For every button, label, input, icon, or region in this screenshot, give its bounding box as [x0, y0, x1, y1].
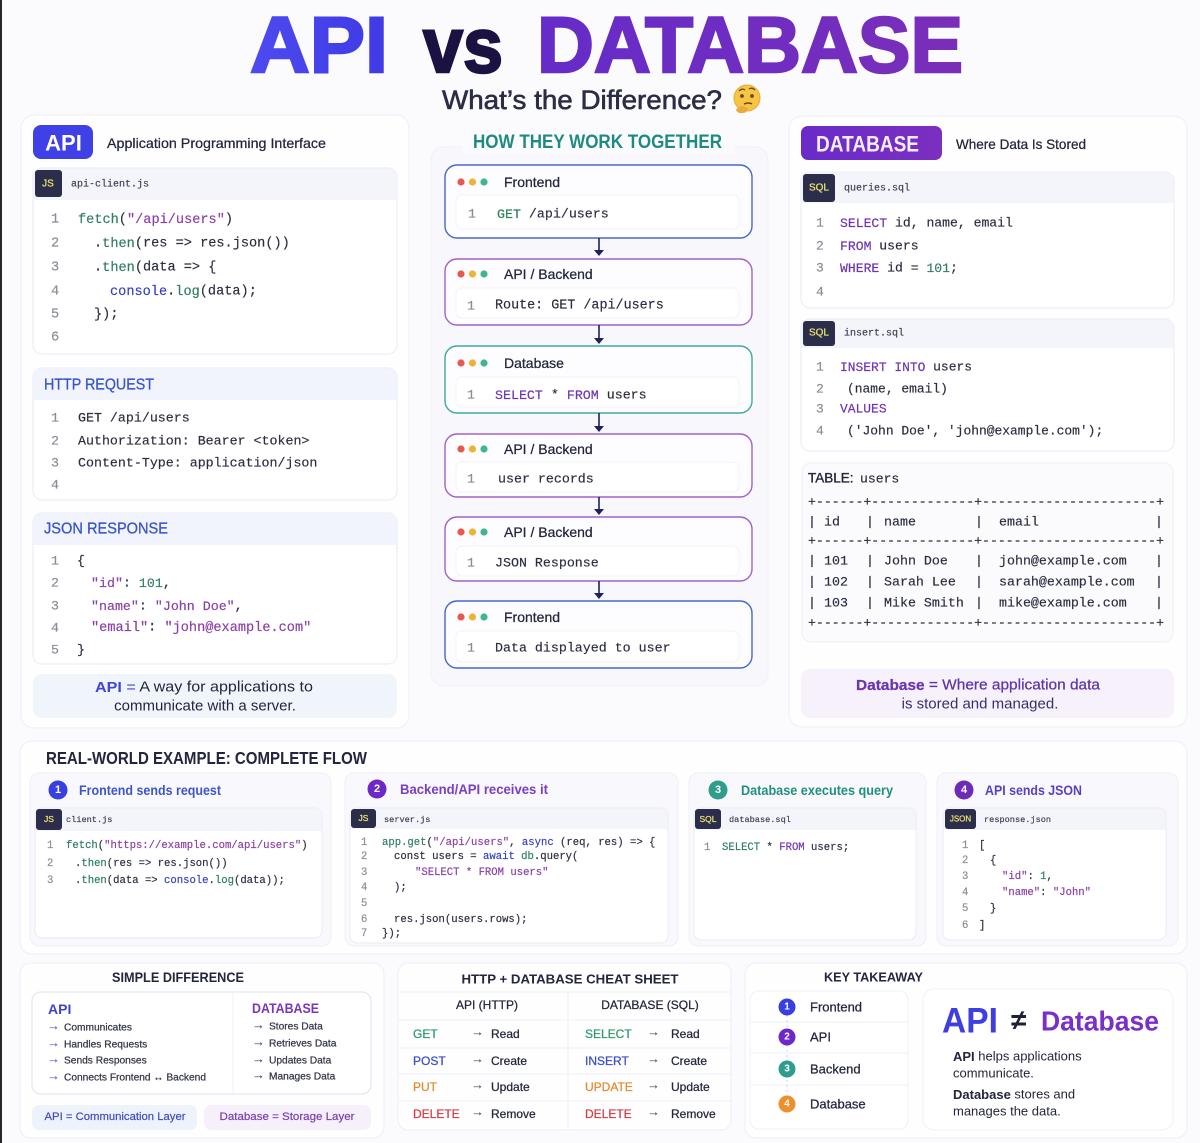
step 1: 2 — [47, 858, 53, 870]
code card: HTTP request: 2 — [51, 434, 59, 449]
table columns: | — [975, 554, 983, 569]
subtitle: What’s the Difference? — [442, 85, 722, 115]
heading: REAL-WORLD EXAMPLE: COMPLETE FLOW — [46, 748, 367, 768]
code card: JSON response: 4 — [51, 621, 59, 636]
comparison box: Connects Frontend ↔ Backend — [64, 1072, 206, 1084]
step 1: 1 — [47, 840, 53, 852]
column: database SQL: → — [647, 1104, 660, 1119]
table columns: 102 — [824, 575, 848, 590]
heading: KEY TAKEAWAY — [824, 970, 923, 984]
column: API HTTP: → — [471, 1024, 484, 1039]
code card: queries.sql: 1 — [816, 216, 824, 231]
code card: api-client.js: console.log(data); — [110, 285, 257, 300]
step: Frontend: GET /api/users — [497, 207, 609, 222]
step: Database: Database — [504, 355, 564, 371]
takeaway card — [923, 989, 1173, 1130]
callout: database definition: Database = Where application data — [856, 676, 1101, 694]
comparison box: Updates Data — [269, 1056, 332, 1066]
table columns: | — [1155, 515, 1163, 530]
table columns: | — [1155, 554, 1163, 569]
takeaway card: ≠ — [1011, 1004, 1026, 1036]
comparison box: → — [47, 1068, 60, 1083]
column: API HTTP: Create — [491, 1054, 527, 1068]
step 2: 1 — [361, 837, 367, 849]
step 4: ] — [979, 920, 985, 932]
flow list: Backend — [810, 1062, 861, 1076]
heading: HOW THEY WORK TOGETHER — [473, 131, 722, 153]
comparison box: API — [48, 1001, 71, 1017]
comparison box: → — [47, 1018, 60, 1033]
column: database SQL: → — [647, 1077, 660, 1092]
step 1: fetch("https://example.com/api/users") — [66, 840, 308, 852]
step 2: 2 — [361, 851, 367, 863]
step 1: 1 — [55, 784, 61, 796]
column: API HTTP: Read — [491, 1027, 520, 1041]
comparison box: → — [47, 1035, 60, 1050]
takeaway card: communicate. — [953, 1066, 1034, 1080]
panel: key takeaway — [745, 963, 1187, 1138]
step: Frontend display: Frontend — [504, 609, 560, 625]
code card: HTTP request: GET /api/users — [78, 411, 190, 426]
step 3: database.sql — [729, 815, 791, 825]
step 4: 4 — [962, 887, 968, 899]
column: API HTTP: PUT — [413, 1080, 438, 1094]
step 4: [ — [979, 840, 985, 852]
step 2: JS — [359, 813, 369, 823]
arrow — [594, 238, 604, 256]
step: Database — [445, 346, 752, 413]
step 1: 3 — [47, 875, 53, 887]
column: API HTTP: Remove — [491, 1107, 536, 1121]
heading: HTTP + DATABASE CHEAT SHEET — [462, 972, 679, 986]
comparison box: Manages Data — [269, 1072, 336, 1082]
column: API HTTP: API (HTTP) — [456, 998, 518, 1012]
code card: JSON response — [33, 513, 397, 664]
code card: api-client.js: 5 — [51, 308, 59, 323]
table columns: email — [999, 515, 1039, 530]
step 3 — [689, 773, 926, 946]
table columns: John Doe — [884, 554, 948, 569]
panel: how they work together — [431, 130, 768, 686]
code card: HTTP request: Content-Type: application/json — [78, 456, 317, 471]
table columns: | — [808, 554, 816, 569]
table: users: TABLE: — [808, 470, 854, 486]
code card: JSON response: JSON RESPONSE — [44, 520, 168, 538]
chip: storage layer — [204, 1105, 371, 1130]
table columns: john@example.com — [999, 554, 1127, 569]
table columns: | — [1155, 575, 1163, 590]
step: Database: SELECT * FROM users — [495, 388, 647, 403]
code card: api-client.js: 4 — [51, 285, 59, 300]
code card: insert.sql: (name, email) — [847, 382, 948, 397]
comparison box: → — [252, 1034, 265, 1049]
panel: cheat sheet — [398, 963, 731, 1130]
arrow — [594, 413, 604, 432]
code card: api-client.js: }); — [94, 308, 118, 323]
takeaway card: API — [942, 1002, 998, 1040]
flow list: Database — [810, 1096, 866, 1112]
step: API / Backend JSON: JSON Response — [495, 556, 599, 571]
table columns: mike@example.com — [999, 596, 1127, 611]
step: API / Backend records — [445, 434, 752, 497]
table columns: | — [866, 596, 874, 611]
column: API HTTP: → — [471, 1104, 484, 1119]
flow list: 4 — [784, 1098, 790, 1110]
API subtitle: Application Programming Interface — [107, 135, 326, 151]
code card: insert.sql: INSERT INTO users — [840, 360, 972, 375]
column: API HTTP: → — [471, 1051, 484, 1066]
step 4: 6 — [962, 920, 968, 932]
comparison box: Communicates — [64, 1022, 132, 1034]
table columns: sarah@example.com — [999, 575, 1135, 590]
flow list: 3 — [784, 1064, 790, 1074]
table columns: | — [866, 575, 874, 590]
column: database SQL: Remove — [671, 1107, 716, 1121]
API badge: API — [45, 130, 82, 156]
panel: simple difference — [20, 963, 384, 1138]
arrow — [594, 325, 604, 344]
step: Database: 1 — [467, 388, 475, 403]
step: API / Backend JSON — [445, 517, 752, 581]
database badge: DATABASE — [816, 132, 919, 156]
code card: JSON response: "email": "john@example.com" — [91, 621, 311, 636]
code card: queries.sql: SQL — [809, 182, 829, 194]
step: Frontend: 1 — [468, 207, 476, 222]
code card: api-client.js: .then(res => res.json()) — [94, 237, 290, 252]
step: Frontend: Frontend — [504, 174, 560, 190]
column: database SQL: INSERT — [585, 1054, 629, 1068]
callout: database definition — [801, 669, 1174, 718]
code card: insert.sql: 1 — [816, 360, 824, 375]
title: API — [250, 0, 388, 89]
code card: api-client.js: fetch("/api/users") — [78, 213, 233, 228]
table: users: +------+-------------+----------------------+ — [808, 616, 1164, 631]
flow list — [750, 991, 908, 1129]
step 1: .then(res => res.json()) — [75, 858, 228, 870]
code card: HTTP request: HTTP REQUEST — [44, 376, 154, 394]
code card: queries.sql — [801, 172, 1174, 308]
table columns: id — [824, 515, 840, 530]
comparison box: Retrieves Data — [269, 1038, 337, 1050]
step 4: 1 — [962, 840, 968, 852]
icon: thinking face — [734, 85, 760, 113]
step 4: } — [990, 903, 996, 915]
step 2: 6 — [361, 914, 367, 926]
code card: api-client.js: api-client.js — [71, 179, 149, 191]
step 3: 1 — [704, 842, 710, 854]
step 1: client.js — [66, 815, 112, 825]
code card: JSON response: 2 — [51, 576, 59, 591]
API badge — [33, 125, 93, 159]
table columns: | — [975, 515, 983, 530]
step 2: 5 — [361, 898, 367, 910]
step 4: API sends JSON — [985, 782, 1082, 798]
step 2: ); — [394, 882, 407, 894]
code card: api-client.js: JS — [42, 178, 54, 190]
code card: HTTP request: 1 — [51, 411, 59, 426]
callout: API definition: API = A way for applications to — [95, 678, 313, 696]
code card: JSON response: "name": "John Doe", — [91, 599, 243, 614]
code card: JSON response: "id": 101, — [91, 576, 171, 591]
table columns: | — [866, 554, 874, 569]
takeaway card: Database — [1041, 1006, 1159, 1036]
column: database SQL: Read — [671, 1027, 700, 1041]
step 4: 4 — [961, 784, 968, 796]
code card: insert.sql: SQL — [809, 328, 829, 338]
chip: communication layer: API = Communication Layer — [44, 1111, 186, 1123]
column: API HTTP: Update — [491, 1080, 530, 1094]
code card: insert.sql: VALUES — [840, 402, 887, 417]
table columns: Sarah Lee — [884, 575, 956, 590]
step 2: 3 — [361, 867, 367, 879]
column: database SQL: DELETE — [585, 1107, 632, 1121]
step 2: server.js — [384, 815, 430, 825]
code card: JSON response: 3 — [51, 599, 59, 614]
code card: queries.sql: WHERE id = 101; — [840, 261, 958, 276]
column: API HTTP: DELETE — [413, 1107, 460, 1121]
comparison box: → — [47, 1051, 60, 1066]
step: API / Backend route — [445, 259, 752, 325]
chip: communication layer — [32, 1105, 197, 1130]
code card: insert.sql: insert.sql — [844, 328, 904, 340]
step 2: Backend/API receives it — [400, 781, 548, 797]
code card: JSON response: } — [77, 643, 85, 658]
step: API / Backend route: API / Backend — [504, 266, 593, 282]
comparison box: → — [252, 1067, 265, 1082]
column: database SQL — [585, 998, 716, 1121]
step 4: 3 — [962, 871, 968, 883]
table columns: Mike Smith — [884, 596, 964, 611]
step: API / Backend records: user records — [498, 472, 594, 487]
step 2: 4 — [361, 882, 367, 894]
code card: queries.sql: 4 — [816, 285, 824, 300]
title: vs — [423, 1, 503, 89]
comparison box — [32, 992, 371, 1094]
code card: JSON response: 5 — [51, 643, 59, 658]
takeaway card: manages the data. — [953, 1104, 1061, 1118]
panel: database — [789, 116, 1187, 727]
column: database SQL: Update — [671, 1080, 710, 1094]
column: database SQL: SELECT — [585, 1027, 632, 1041]
comparison box: → — [252, 1051, 265, 1066]
step 1: .then(data => console.log(data)); — [75, 875, 285, 887]
step 3: SELECT * FROM users; — [722, 842, 849, 854]
comparison box: Sends Responses — [64, 1056, 147, 1066]
panel: real-world example — [20, 741, 1187, 954]
step: API / Backend records: 1 — [467, 472, 475, 487]
step 3: SQL — [699, 814, 717, 824]
flow list: 2 — [784, 1032, 790, 1042]
column: database SQL: DATABASE (SQL) — [601, 998, 699, 1012]
table columns: | — [975, 575, 983, 590]
database badge — [801, 126, 942, 160]
step 2: app.get("/api/users", async (req, res) => { — [382, 837, 655, 849]
code card: JSON response: 1 — [51, 554, 59, 569]
comparison box: Stores Data — [269, 1022, 323, 1032]
step 4: 2 — [962, 855, 968, 867]
code card: queries.sql: SELECT id, name, email — [840, 216, 1013, 231]
takeaway card: API helps applications — [953, 1048, 1082, 1064]
table columns: | — [1155, 596, 1163, 611]
code card: JSON response: { — [77, 554, 85, 569]
callout: database definition: is stored and managed. — [902, 696, 1058, 712]
column: database SQL: Create — [671, 1054, 707, 1068]
step: API / Backend route: Route: GET /api/users — [495, 299, 664, 314]
step 2: 2 — [374, 783, 380, 795]
step: Frontend — [445, 165, 752, 238]
flow list: API — [810, 1030, 831, 1044]
table columns: | — [808, 515, 816, 530]
step 2: res.json(users.rows); — [394, 914, 528, 926]
table: users — [802, 463, 1173, 642]
step 4 — [937, 773, 1178, 946]
column: API HTTP — [413, 998, 536, 1121]
comparison box: DATABASE — [252, 1000, 319, 1016]
step: Frontend display — [445, 601, 752, 668]
table columns — [808, 515, 1163, 611]
table columns: 101 — [824, 554, 848, 569]
step 4: { — [990, 855, 996, 867]
heading: SIMPLE DIFFERENCE — [112, 969, 244, 985]
table columns: name — [884, 515, 916, 530]
column: database SQL: → — [647, 1051, 660, 1066]
column: API HTTP: → — [471, 1077, 484, 1092]
code card: api-client.js: .then(data => { — [94, 261, 216, 276]
step 1 — [30, 773, 331, 946]
code card: insert.sql: 2 — [816, 382, 824, 397]
column: database SQL: UPDATE — [585, 1080, 633, 1094]
table columns: | — [808, 596, 816, 611]
column: API HTTP: GET — [413, 1027, 438, 1041]
code card: api-client.js: 2 — [51, 237, 59, 252]
column: API HTTP: POST — [413, 1054, 446, 1068]
code card: api-client.js: 3 — [51, 261, 59, 276]
code card: insert.sql: 3 — [816, 402, 824, 417]
step 2: }); — [382, 928, 401, 940]
arrow — [594, 497, 604, 515]
code card: api-client.js — [33, 168, 397, 354]
table columns: | — [808, 575, 816, 590]
step 4: JSON — [950, 814, 971, 824]
callout: API definition — [33, 674, 397, 718]
chip: storage layer: Database = Storage Layer — [220, 1111, 355, 1123]
step 2 — [345, 773, 678, 946]
code card: insert.sql: 4 — [816, 424, 824, 439]
step: Frontend display: Data displayed to user — [495, 641, 671, 656]
takeaway card: Database stores and — [953, 1086, 1075, 1102]
table columns: 103 — [824, 596, 848, 611]
step: Frontend display: 1 — [467, 641, 475, 656]
column: database SQL: → — [647, 1024, 660, 1039]
table: users: users — [860, 472, 899, 487]
table: users: +------+-------------+----------------------+ — [808, 534, 1164, 549]
step 2: const users = await db.query( — [394, 851, 578, 863]
panel: API — [21, 115, 409, 728]
title — [250, 0, 963, 89]
step 4: "id": 1, — [1002, 871, 1053, 883]
callout: API definition: communicate with a server. — [114, 698, 296, 714]
code card: queries.sql: FROM users — [840, 239, 919, 254]
step: API / Backend route: 1 — [467, 299, 475, 314]
step 3: Database executes query — [741, 782, 893, 798]
table columns: | — [975, 596, 983, 611]
table columns: | — [866, 515, 874, 530]
code card: HTTP request: Authorization: Bearer <token> — [78, 434, 309, 449]
code card: HTTP request: 4 — [51, 478, 59, 493]
title: DATABASE — [537, 0, 963, 89]
database subtitle: Where Data Is Stored — [956, 136, 1086, 152]
code card: api-client.js: 6 — [51, 331, 59, 346]
arrow — [594, 581, 604, 599]
table: users: +------+-------------+----------------------+ — [808, 495, 1164, 510]
flow list: 1 — [784, 1002, 790, 1012]
step 4: "name": "John" — [1002, 887, 1091, 899]
code card: insert.sql: ('John Doe', 'john@example.com'); — [847, 424, 1103, 439]
code card: insert.sql — [801, 319, 1174, 451]
comparison box: → — [252, 1017, 265, 1032]
code card: queries.sql: queries.sql — [844, 183, 910, 195]
step: API / Backend JSON: 1 — [467, 556, 475, 571]
step 1: JS — [44, 814, 54, 824]
step: API / Backend records: API / Backend — [504, 441, 593, 457]
comparison box: Handles Requests — [64, 1040, 147, 1050]
step 1: Frontend sends request — [79, 782, 221, 798]
step: API / Backend JSON: API / Backend — [504, 524, 593, 540]
code card: HTTP request — [33, 368, 397, 500]
code card: api-client.js: 1 — [51, 213, 59, 228]
flow list: Frontend — [810, 1000, 862, 1014]
step 4: 5 — [962, 903, 968, 915]
code card: HTTP request: 3 — [51, 456, 59, 471]
step 2: "SELECT * FROM users" — [415, 867, 549, 879]
step 3: 3 — [715, 784, 721, 796]
step 4: response.json — [984, 815, 1051, 825]
code card: queries.sql: 2 — [816, 239, 824, 254]
step 2: 7 — [361, 928, 367, 940]
code card: queries.sql: 3 — [816, 261, 824, 276]
